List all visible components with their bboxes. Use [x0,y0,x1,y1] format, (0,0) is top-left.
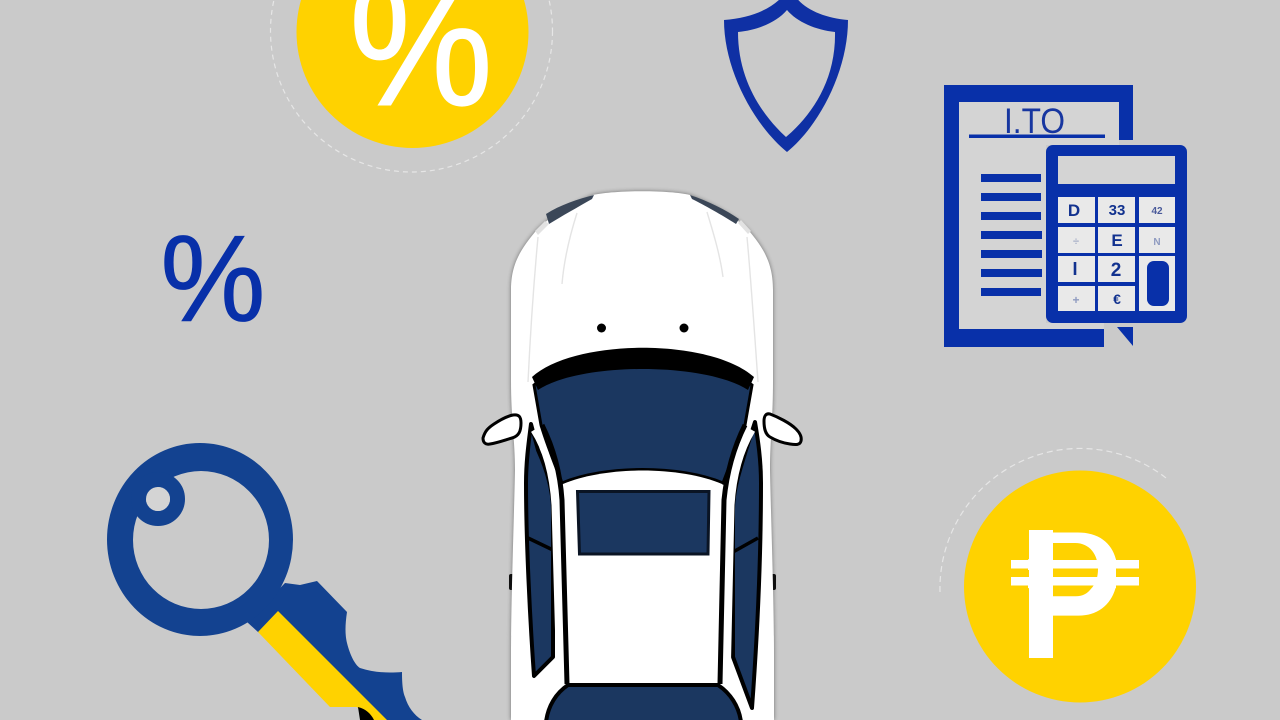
calculator key labels [1068,201,1163,307]
icon: key [107,443,422,720]
icon: shield [724,0,848,152]
calculator key labels: 2 [1111,260,1121,281]
calculator key labels: € [1113,291,1121,307]
icon: peso coin [940,448,1196,702]
icon: document with calculator [944,85,1187,347]
calculator key labels: + [1072,293,1080,307]
calculator key labels: 42 [1151,206,1163,217]
headlights [535,195,751,235]
percent sign: % [161,210,265,348]
roof [534,425,752,685]
calculator key labels: 33 [1109,202,1125,219]
calculator key labels: N [1153,237,1161,248]
document lines [981,174,1042,296]
document [944,85,1133,347]
calculator [1046,145,1187,323]
mirror right [764,414,801,445]
calculator key labels: I [1072,259,1078,279]
car body [511,191,774,720]
sunroof [578,492,709,554]
hood dots [597,324,606,332]
document title: I.TO [1004,102,1065,141]
mirror left [483,415,521,444]
rear window [546,685,741,720]
icon: yellow percent coin [270,0,552,172]
icon: peso coin: ₱ [1019,492,1124,697]
illustration: car from above [483,191,801,720]
side window left [526,424,553,676]
calculator key labels: D [1068,201,1080,220]
calculator key labels: ÷ [1073,236,1079,248]
side window right [733,422,761,708]
hood lines [528,212,758,382]
windshield [532,348,754,483]
calculator key labels: E [1111,231,1123,250]
side tabs [509,574,514,590]
